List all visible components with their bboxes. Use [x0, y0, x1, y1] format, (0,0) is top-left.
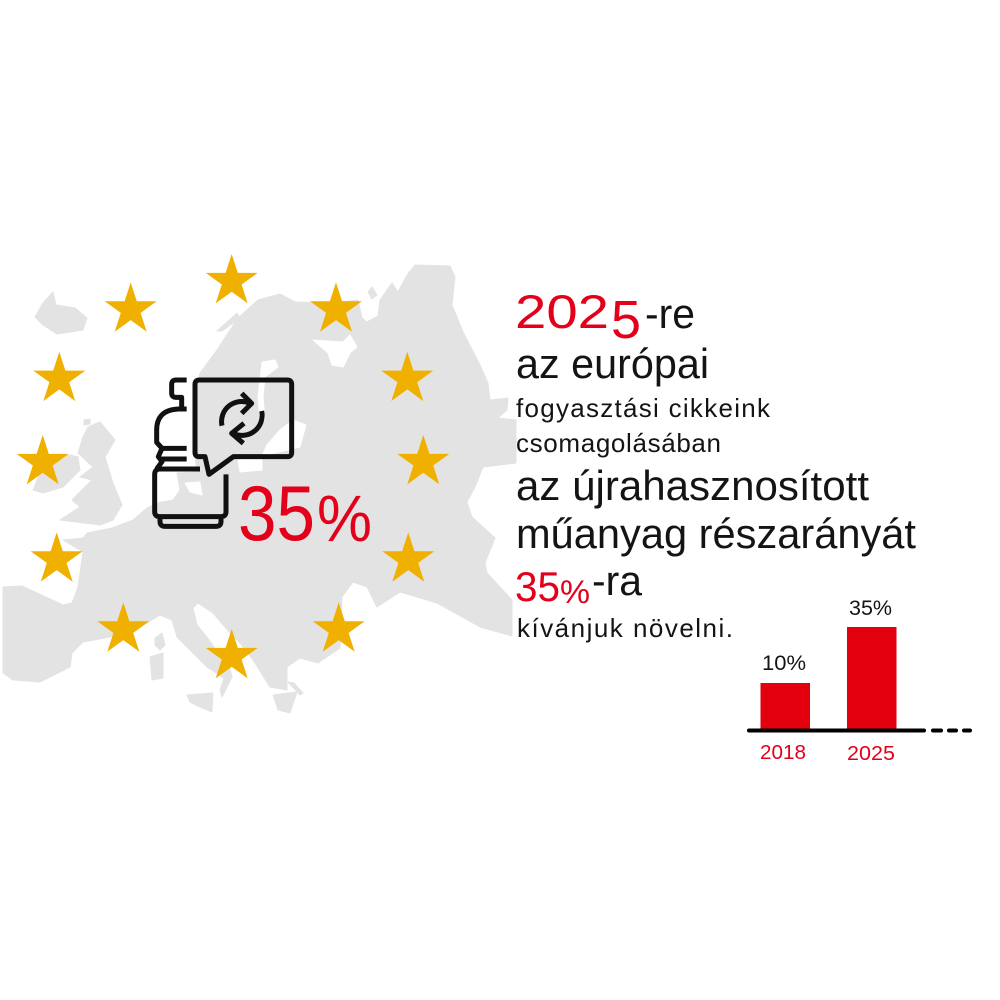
icon: bottle	[155, 380, 226, 526]
text: műanyag részarányát: műanyag részarányát	[516, 510, 916, 557]
text: 2025-re: 5	[611, 290, 641, 350]
bar chart	[749, 597, 970, 765]
year label: 2018: 2018	[760, 742, 806, 764]
text: 35%-ra	[515, 557, 643, 610]
text: az európai: az európai	[516, 340, 709, 387]
text: fogyasztási cikkeink: fogyasztási cikkeink	[516, 393, 771, 423]
chart axis	[749, 728, 924, 732]
map of Europe	[3, 265, 516, 713]
value label: 35%: 35%	[849, 597, 892, 620]
big 35 percent: %	[317, 481, 372, 555]
text: 35%-ra: %	[560, 574, 590, 610]
circle of EU stars	[17, 254, 449, 678]
text: kívánjuk növelni.: kívánjuk növelni.	[517, 613, 733, 643]
icon: bottle with recycling speech bubble	[155, 380, 292, 526]
seas	[185, 335, 357, 495]
value label: 10%: 10%	[762, 652, 806, 675]
headline text block	[515, 285, 916, 643]
text: 35%-ra: 35	[515, 563, 560, 610]
bar: 2018	[760, 683, 810, 730]
icon: speech bubble	[195, 380, 292, 474]
text: 2025-re	[515, 285, 695, 350]
big 35 percent: 35	[238, 469, 315, 557]
big 35 percent	[238, 469, 372, 557]
text: csomagolásában: csomagolásában	[516, 428, 721, 458]
text: 35%-ra: -ra	[592, 557, 643, 604]
chart axis dashes	[933, 728, 970, 732]
text: az újrahasznosított: az újrahasznosított	[516, 462, 869, 509]
text: 2025-re: 202	[515, 285, 609, 338]
icon: recycling arrows	[222, 393, 262, 443]
text: 2025-re: -re	[645, 290, 695, 337]
bar: 2025	[847, 627, 896, 730]
year label: 2025: 2025	[847, 743, 895, 765]
